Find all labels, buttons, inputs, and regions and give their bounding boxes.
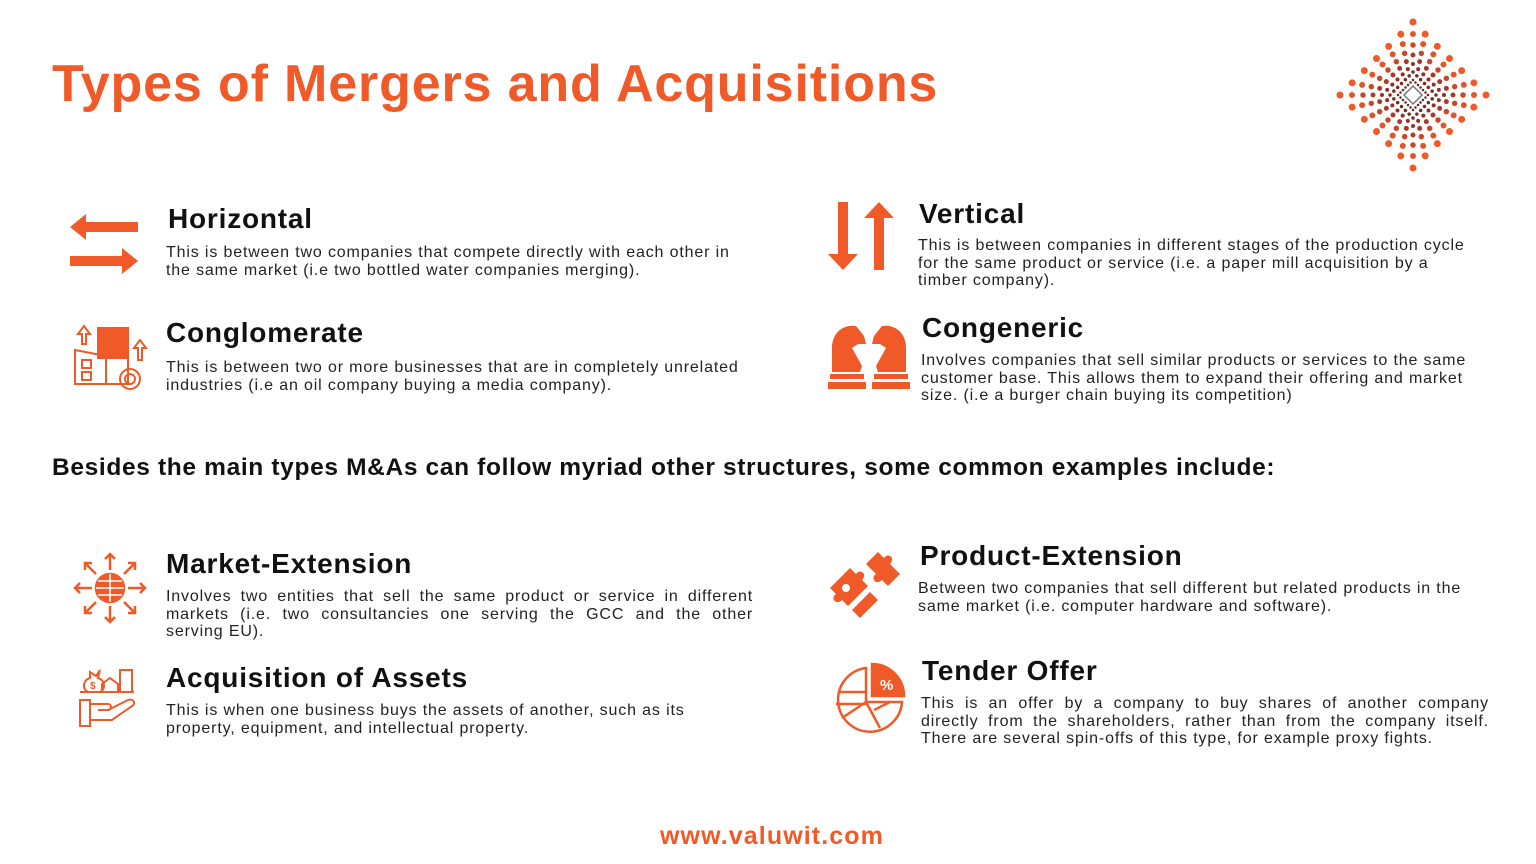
panel: tender offer — [836, 655, 1489, 747]
text: horizontal: This is between two companies that compete directly with each other in the same market (i.e two bottled water companies merging). — [166, 244, 730, 279]
panel: congeneric — [828, 312, 1466, 404]
heading: product-extension: Product-Extension — [920, 540, 1183, 571]
heading: conglomerate: Conglomerate — [166, 317, 364, 348]
panel: vertical — [828, 198, 1465, 289]
panel: conglomerate — [74, 317, 739, 394]
footer: website: www.valuwit.com — [660, 822, 884, 850]
heading: acquisition of assets: Acquisition of Assets — [166, 662, 468, 693]
icon: pie chart with percent — [836, 662, 906, 733]
subheading: other structures: Besides the main types M&As can follow myriad other structures, some common examples include: — [52, 454, 1275, 481]
icon: hand with assets: $ — [90, 681, 96, 692]
text: conglomerate: This is between two or more businesses that are in completely unrelated industries (i.e an oil company buying a media company). — [166, 359, 739, 394]
heading: vertical: Vertical — [919, 198, 1025, 229]
icon: buildings with gear — [74, 324, 148, 390]
text: market-extension: Involves two entities that sell the same product or service in different markets (i.e. two consultancies one serving the GCC and the other serving EU). — [166, 588, 753, 640]
text: product-extension: Between two companies that sell different but related products in the same market (i.e. computer hardware and software). — [918, 580, 1461, 615]
heading: congeneric: Congeneric — [922, 312, 1084, 343]
icon: hand with assets — [79, 669, 136, 727]
text: congeneric: Involves companies that sell similar products or services to the same customer base. This allows them to expand their offering and market size. (i.e a burger chain buying its competition) — [921, 352, 1466, 404]
text: acquisition of assets: This is when one business buys the assets of another, such as its property, equipment, and intellectual property. — [166, 702, 685, 737]
panel: horizontal — [70, 203, 730, 279]
panel: market-extension — [73, 548, 753, 640]
icon: globe with arrows — [73, 552, 147, 624]
heading: tender offer: Tender Offer — [922, 655, 1098, 686]
panel: product-extension — [830, 540, 1461, 618]
icon: horizontal arrows — [70, 214, 138, 274]
text: tender offer: This is an offer by a company to buy shares of another company directly from the shareholders, rather than from the company itself. There are several spin-offs of this type, for example proxy fights. — [921, 695, 1489, 747]
heading: horizontal: Horizontal — [168, 203, 313, 234]
icon: pie chart with percent: % — [880, 677, 893, 694]
icon: vertical arrows — [828, 202, 894, 270]
icon: puzzle pieces — [830, 552, 900, 618]
heading: market-extension: Market-Extension — [166, 548, 412, 579]
text: vertical: This is between companies in different stages of the production cycle for the same product or service (i.e. a paper mill acquisition by a timber company). — [918, 237, 1465, 289]
decorative dot diamond — [1336, 18, 1490, 172]
title: Types of Mergers and Acquisitions — [52, 55, 938, 113]
icon: chess knights — [828, 326, 910, 389]
panel: acquisition of assets — [79, 662, 685, 737]
